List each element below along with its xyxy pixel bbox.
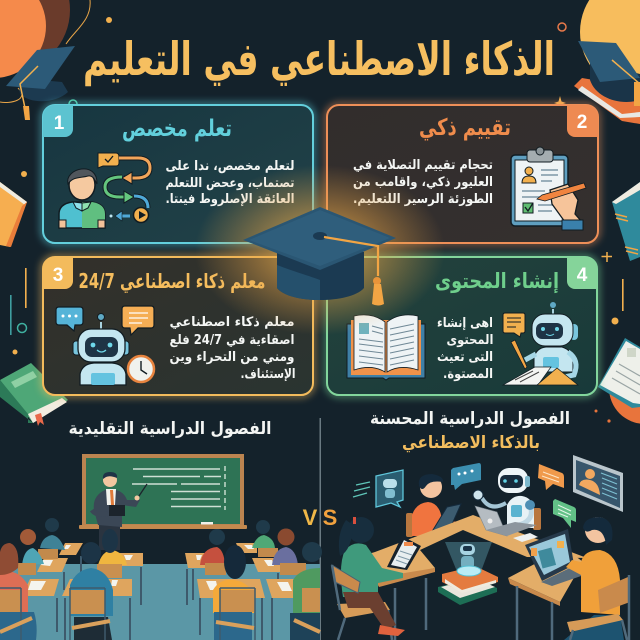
panel 3: 24/7 AI tutor — [43, 257, 313, 395]
wall screen — [573, 455, 623, 512]
body text 4: اهى إنشاء — [437, 316, 493, 331]
decoration: top-right circle, book and cap — [554, 0, 640, 124]
chat bubbles — [451, 463, 576, 528]
heading: AI-enhanced classrooms: الفصول الدراسية المحسنة — [370, 409, 570, 429]
body text 1: العائقة الإصلروط فينتا. — [166, 192, 294, 207]
body text 4: المصتوة. — [443, 367, 493, 382]
heading 1: تعلم مخصص — [122, 116, 232, 142]
boy with laptop and desk — [508, 517, 630, 640]
body text 2: العليور ذكي، واقامب من — [353, 175, 493, 190]
body text 1 — [166, 159, 294, 207]
laptop — [475, 506, 538, 542]
VS label: S — [323, 505, 337, 530]
icon: clipboard with hand — [511, 147, 586, 230]
icon: robot writing — [503, 302, 578, 385]
body text 1: تصتماب، وعحض اللتعلم — [166, 176, 294, 191]
heading: traditional classrooms: الفصول الدراسية التقليدية — [68, 419, 272, 439]
VS label: V — [303, 505, 318, 530]
body text 3: اصقاءية في 24/7 فلع — [170, 333, 294, 348]
body text 3: الإستئناف. — [240, 367, 296, 382]
icon: robot tutor with clock — [56, 306, 154, 385]
badge 3 — [43, 257, 73, 289]
icon: open book — [347, 315, 425, 380]
badge 2: 2 — [577, 112, 587, 133]
boy with tablet — [406, 474, 461, 537]
body text 2: تحجام تقييم التصلاية في — [353, 158, 493, 173]
decoration: right-side books and accents — [594, 182, 640, 424]
panel 2: smart assessment — [327, 105, 598, 243]
body text 3: معلم ذكاء اصطناعي — [170, 315, 294, 330]
floating hologram panel — [353, 470, 403, 507]
badge 4 — [567, 257, 597, 289]
icon: learner with path — [59, 153, 150, 228]
L-shaped desk — [365, 515, 587, 582]
badge 1 — [43, 105, 73, 137]
section divider — [320, 418, 321, 640]
central graduation cap — [195, 165, 445, 335]
robot at laptop — [473, 468, 541, 530]
girl with tablet and desk — [332, 517, 435, 640]
student desks — [22, 543, 302, 598]
VS label — [303, 505, 337, 530]
heading: AI-enhanced classrooms: بالذكاء الاصطناعي — [402, 433, 540, 453]
hologram on books — [438, 542, 498, 605]
body text 4: التى تعيث — [437, 350, 493, 365]
heading: AI-enhanced classrooms — [370, 409, 570, 453]
badge 2 — [567, 105, 598, 137]
panel 4: content creation — [327, 257, 597, 395]
badge 4: 4 — [577, 265, 588, 286]
panel 1: personalised learning — [43, 105, 313, 243]
body text 4 — [437, 316, 494, 382]
badge 1: 1 — [54, 113, 65, 134]
heading 3: معلم ذكاء اصطناعي 24/7 — [79, 269, 266, 294]
badge 3: 3 — [53, 265, 63, 286]
students — [0, 518, 322, 640]
heading 4: إنشاء المحتوى — [435, 269, 559, 293]
body text 1: لتعلم مخصص، ندا على — [166, 159, 294, 174]
teacher — [92, 472, 147, 550]
body text 3: ومني من التحراء وين — [170, 350, 294, 365]
body text 2 — [353, 158, 493, 207]
illustration: AI classroom — [332, 455, 630, 640]
decoration: top-left circles and cap — [0, 0, 112, 120]
body text 4: المحتوى — [446, 333, 494, 348]
blackboard — [79, 454, 247, 529]
body text 2: الطوزئة الرسير اللتعليم. — [353, 192, 493, 207]
floor — [0, 564, 320, 640]
decoration: left-side book and accents — [0, 171, 68, 426]
body text 3 — [170, 315, 296, 382]
desk legs — [57, 553, 278, 640]
paper sheets — [28, 545, 292, 591]
illustration: traditional classroom — [0, 454, 322, 640]
heading 2: تقييم ذكي — [419, 115, 511, 141]
